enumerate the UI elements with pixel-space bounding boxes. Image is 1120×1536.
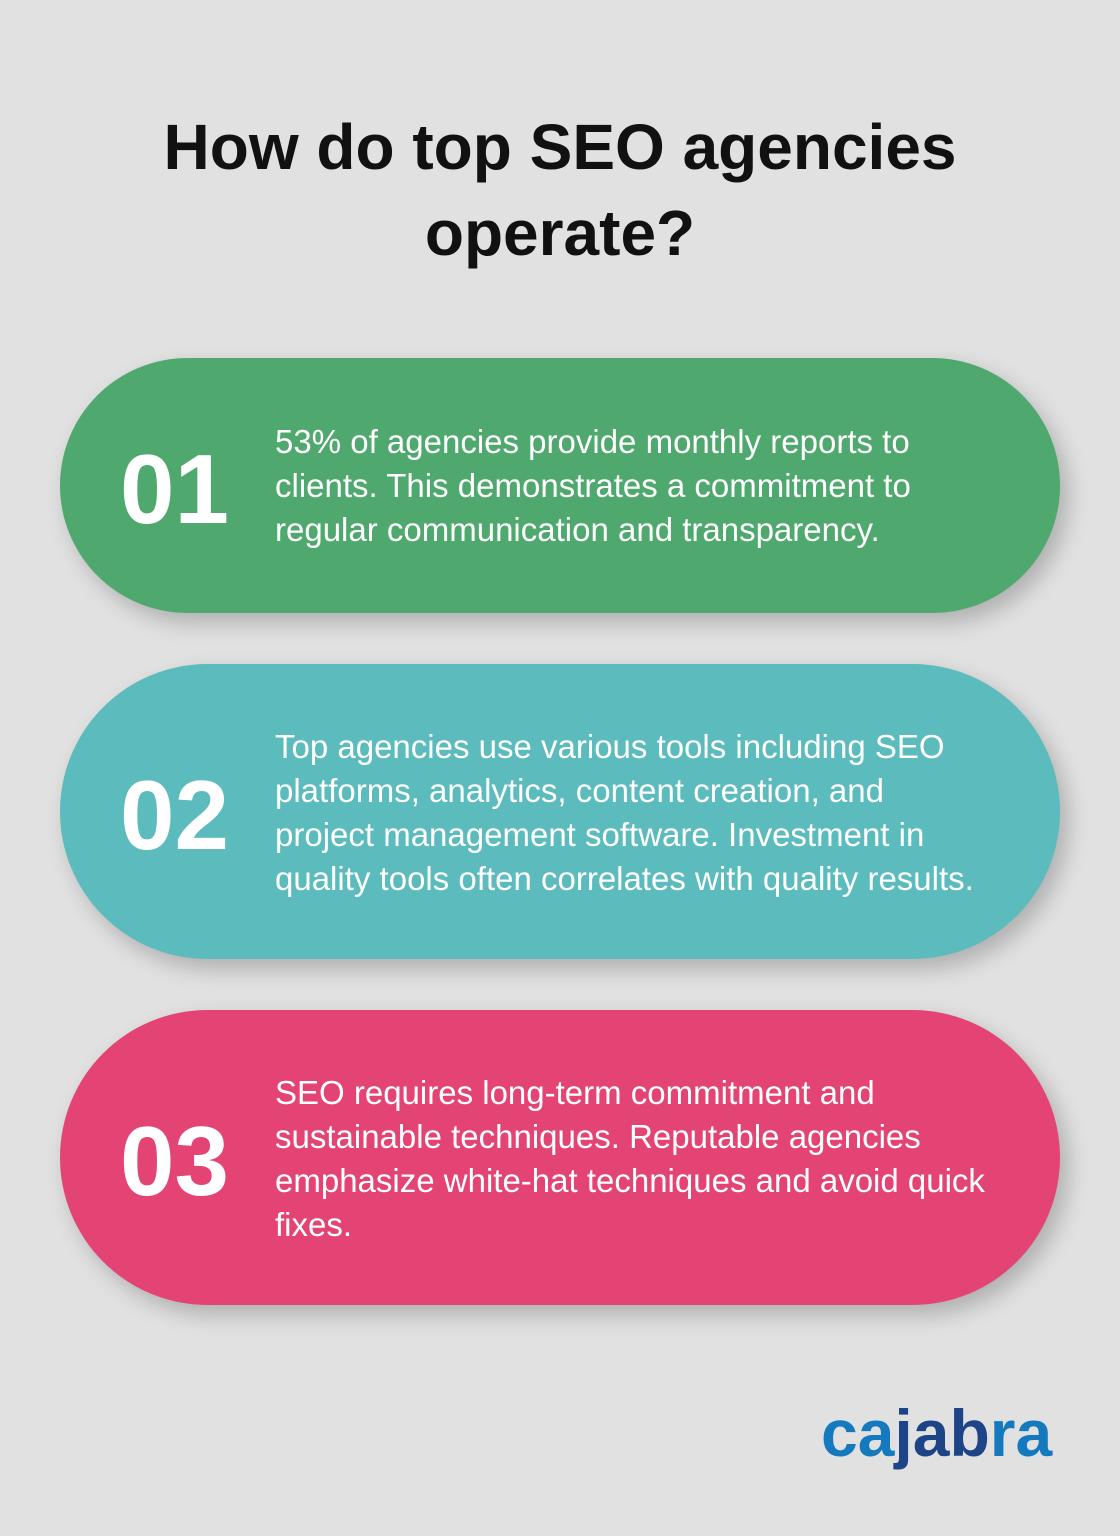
text 03: sustainable techniques. Reputable agencies <box>275 1118 921 1155</box>
logo: cajabra: cajabra <box>821 1396 1052 1470</box>
text 03: SEO requires long-term commitment and <box>275 1074 875 1111</box>
title: operate? <box>425 197 695 269</box>
text 02: Top agencies use various tools including SEO <box>275 728 945 765</box>
number 02: 02 <box>120 760 229 870</box>
panel: item 01 <box>60 358 1060 613</box>
panel: item 02 <box>60 664 1060 959</box>
text 01: 53% of agencies provide monthly reports to <box>275 423 910 460</box>
title: How do top SEO agencies <box>164 111 956 183</box>
text 03: emphasize white-hat techniques and avoid quick <box>275 1162 985 1199</box>
text 02 <box>275 728 974 897</box>
number 03: 03 <box>120 1106 229 1216</box>
text 01 <box>275 423 911 548</box>
panel: item 03 <box>60 1010 1060 1305</box>
number 01: 01 <box>120 434 229 544</box>
text 02: project management software. Investment in <box>275 816 924 853</box>
text 01: clients. This demonstrates a commitment to <box>275 467 911 504</box>
text 01: regular communication and transparency. <box>275 511 880 548</box>
text 02: platforms, analytics, content creation, and <box>275 772 884 809</box>
text 03: fixes. <box>275 1206 352 1243</box>
title <box>164 111 956 269</box>
text 03 <box>275 1074 985 1243</box>
text 02: quality tools often correlates with quality results. <box>275 860 974 897</box>
